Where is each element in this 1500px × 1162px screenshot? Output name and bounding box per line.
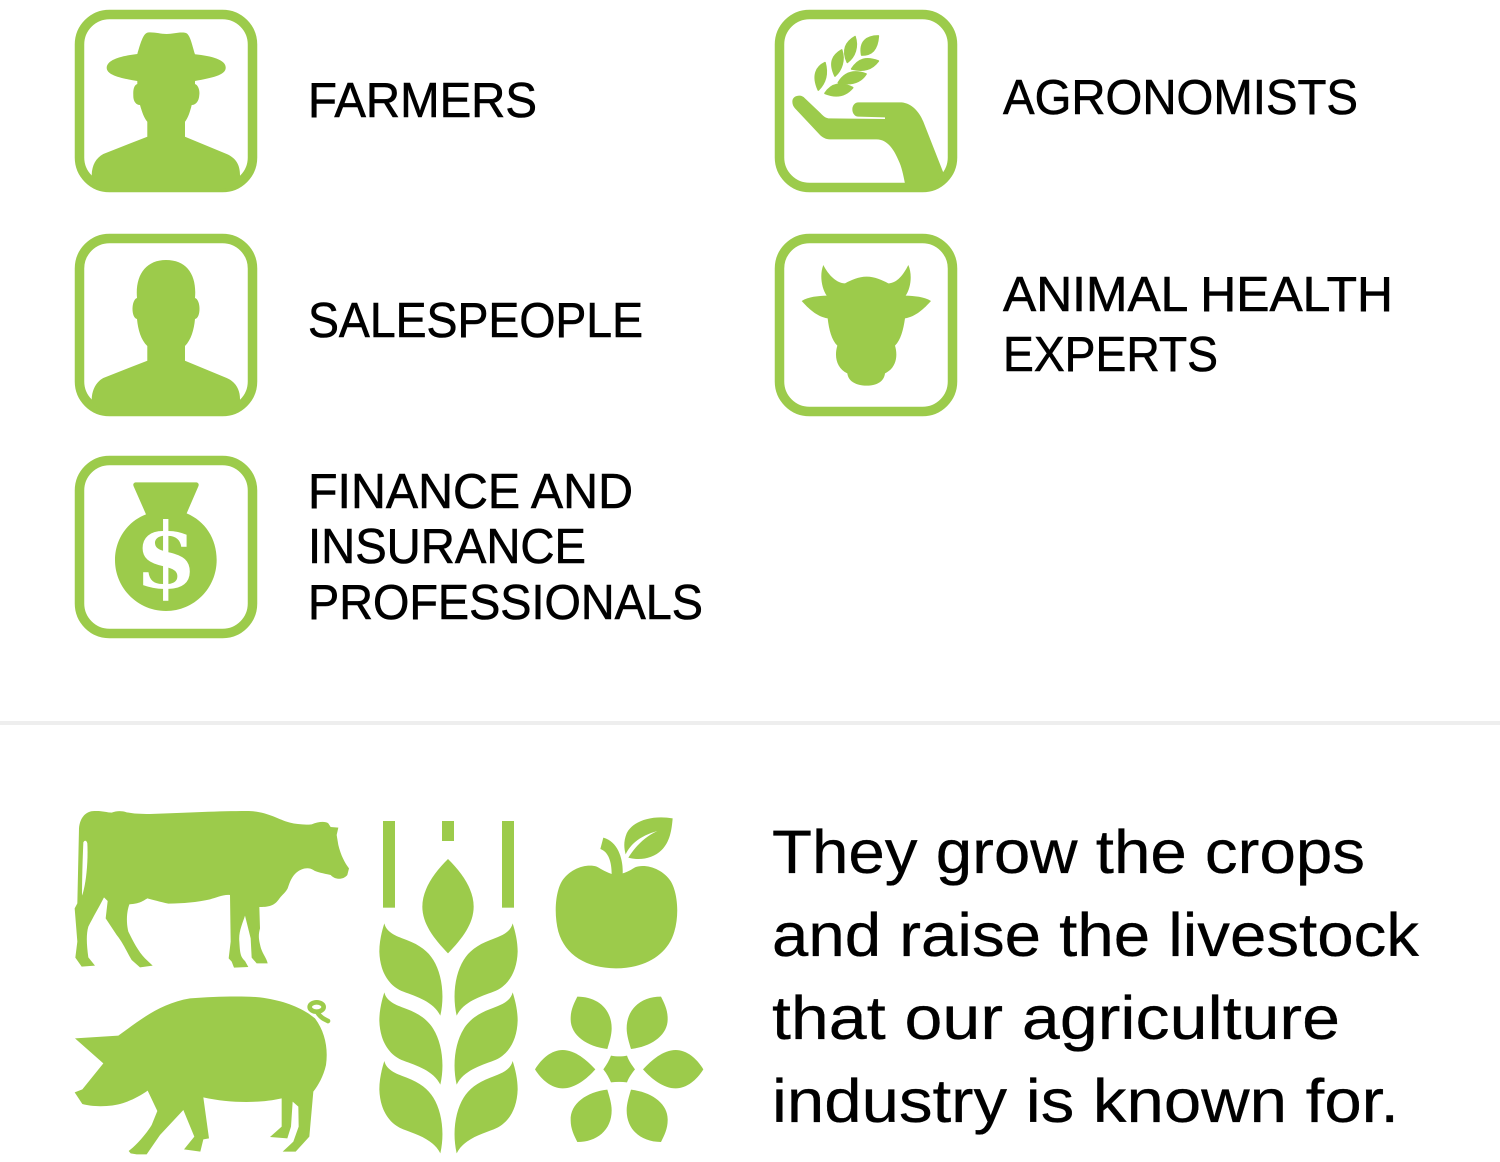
text block: description: and raise the livestock [772, 901, 1420, 969]
icon: cow head [780, 238, 952, 412]
label: salespeople: SALESPEOPLE [308, 294, 643, 348]
icon: money bag: $ [135, 505, 197, 610]
label: finance and insurance professionals: INSURANCE [308, 520, 586, 574]
label: finance and insurance professionals: PROFESSIONALS [308, 576, 703, 630]
label: farmers: FARMERS [308, 74, 537, 128]
panel: animal health experts [780, 238, 1393, 412]
icon: apple [556, 817, 677, 968]
icon: wheat ear [379, 821, 518, 1153]
label: animal health experts: ANIMAL HEALTH [1003, 268, 1393, 322]
panel: farmers [80, 14, 537, 191]
panel: finance and insurance professionals [80, 460, 703, 634]
text block: description: They grow the crops [772, 818, 1365, 886]
icon: person [80, 238, 252, 415]
label: finance and insurance professionals: FINANCE AND [308, 465, 633, 519]
icon: farmer [80, 14, 252, 191]
label: agronomists: AGRONOMISTS [1003, 71, 1358, 125]
icon: money bag [80, 460, 252, 634]
icon: dairy cow [75, 811, 349, 968]
label: animal health experts: EXPERTS [1003, 328, 1218, 382]
label: animal health experts [1003, 268, 1393, 382]
panel: salespeople [80, 238, 643, 415]
text block: description [772, 818, 1420, 1135]
text block: description: that our agriculture [772, 984, 1340, 1052]
label: finance and insurance professionals [308, 465, 703, 630]
icon: hand holding wheat [780, 14, 952, 188]
icon: pig [75, 996, 328, 1154]
icon: flower [535, 997, 703, 1142]
panel: agronomists [780, 14, 1358, 188]
text block: description: industry is known for. [772, 1067, 1399, 1135]
